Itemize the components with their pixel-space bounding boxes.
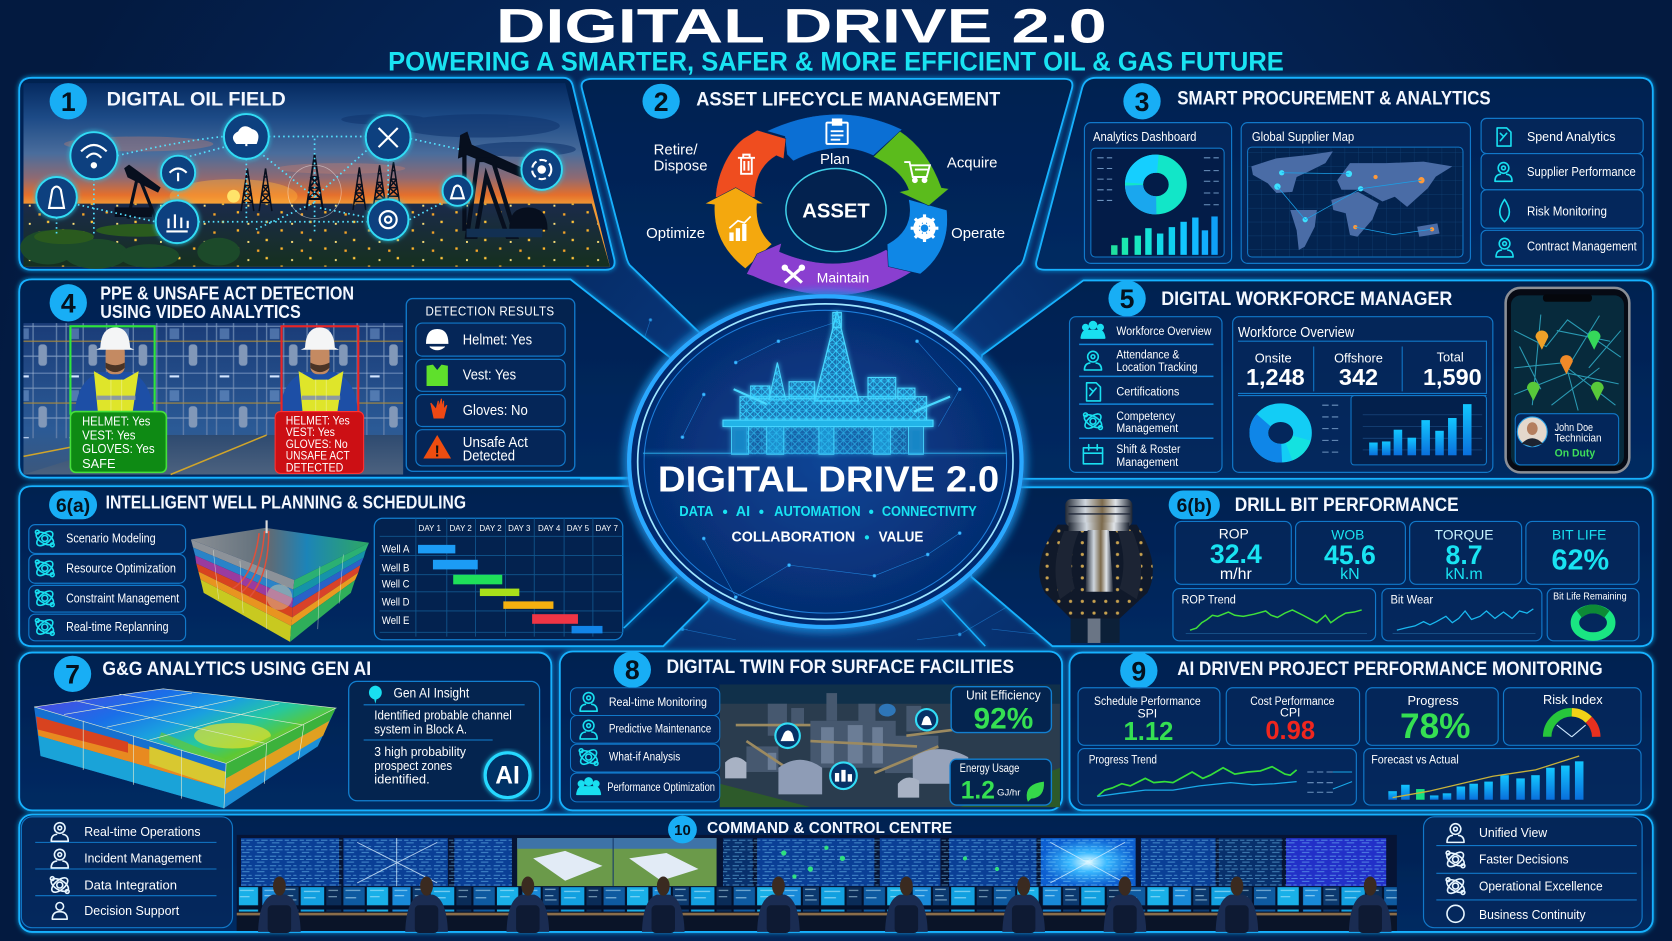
hub keywords: VALUE <box>879 530 924 546</box>
badge 5 <box>1108 280 1146 317</box>
workforce list: Workforce Overview <box>1116 324 1211 338</box>
planning list: Resource Optimization <box>66 561 176 576</box>
lifecycle ring <box>705 114 949 295</box>
3D reservoir block <box>191 520 369 642</box>
workforce overview card: Offshore <box>1334 351 1383 366</box>
facility node glyphs <box>781 716 932 782</box>
left capability list: Data Integration <box>84 877 177 892</box>
twin list: Predictive Maintenance <box>609 723 711 736</box>
workforce overview card: 342 <box>1339 364 1378 390</box>
panel 4: PPE and unsafe act detection <box>19 279 693 478</box>
heading: ASSET LIFECYCLE MANAGEMENT <box>696 90 1000 111</box>
panel 3: smart procurement and analytics <box>1036 78 1653 270</box>
hub keywords: CONNECTIVITY <box>882 504 977 520</box>
workforce list: Management <box>1116 455 1179 469</box>
Gen AI insight card: system in Block A. <box>374 722 467 737</box>
metric cards: 8.7 <box>1446 540 1483 570</box>
safe label: HELMET: Yes <box>82 413 150 428</box>
procurement list: Risk Monitoring <box>1527 203 1607 218</box>
network background pattern <box>574 318 1068 640</box>
metric cards: m/hr <box>1220 566 1253 583</box>
unit efficiency card <box>951 687 1051 735</box>
badge 6a: 6(a) <box>56 496 90 517</box>
KPI: progress: 78% <box>1400 707 1470 746</box>
video wall <box>237 835 1397 933</box>
KPI: risk index gauge: Risk Index <box>1543 692 1603 707</box>
metric cards: 62% <box>1551 544 1609 576</box>
panel 8: digital twin for surface facilities <box>560 652 1062 810</box>
unsafe label: UNSAFE ACT <box>286 450 350 463</box>
Gen AI insight card: Identified probable channel <box>374 708 512 723</box>
workforce overview card: Total <box>1437 349 1464 364</box>
workforce overview card <box>1233 317 1493 472</box>
worker unsafe <box>279 326 358 415</box>
unsafe label: HELMET: Yes <box>286 414 350 427</box>
lifecycle labels: Optimize <box>646 225 705 242</box>
bit wear chart <box>1382 589 1542 641</box>
icon: vest <box>427 365 448 386</box>
workforce list: Shift & Roster <box>1116 442 1180 456</box>
badge 9: 9 <box>1131 656 1146 686</box>
AI badge: AI <box>495 763 520 790</box>
energy usage card: GJ/hr <box>997 787 1021 798</box>
metric cards: WOB <box>1331 527 1364 543</box>
panel 7: G&G analytics using gen AI <box>19 653 551 810</box>
phone mockup <box>1506 288 1629 472</box>
workforce list: Attendance & <box>1116 347 1179 361</box>
gantt chart: DAY 3 <box>508 524 531 533</box>
gantt chart: DAY 2 <box>449 524 472 533</box>
KPI: cost performance: 0.98 <box>1265 717 1315 745</box>
KPI: schedule performance: SPI <box>1137 707 1157 721</box>
planning list <box>29 525 186 641</box>
KPI: progress <box>1366 688 1498 746</box>
forecast vs actual chart: Forecast vs Actual <box>1371 752 1459 766</box>
KPI: progress: Progress <box>1408 693 1459 708</box>
KPI: risk index gauge <box>1503 688 1641 745</box>
gantt chart: DAY 7 <box>596 524 618 533</box>
gantt chart: Well B <box>382 563 409 575</box>
icon: cart <box>904 162 930 182</box>
icon nodes <box>36 114 562 243</box>
badge 8 <box>614 652 651 688</box>
badge 3: 3 <box>1135 87 1149 117</box>
gantt chart: DAY 4 <box>538 524 561 533</box>
pump jack small <box>115 165 160 219</box>
KPI: cost performance: CPI <box>1280 706 1300 720</box>
facility nodes <box>775 709 937 789</box>
twin list <box>570 688 720 802</box>
metric cards: ROP <box>1219 525 1249 541</box>
workforce overview card: Onsite <box>1255 351 1292 366</box>
detection results card <box>406 299 575 471</box>
hub keywords <box>679 504 977 546</box>
right benefits list <box>1424 817 1642 928</box>
KPI: schedule performance: Schedule Performance <box>1094 694 1201 708</box>
energy usage card: Energy Usage <box>960 761 1020 775</box>
node icon glyphs <box>49 127 551 231</box>
asset hub <box>786 168 886 252</box>
analytics dashboard card <box>1084 123 1232 263</box>
asset hub: ASSET <box>802 201 870 223</box>
oil field photo <box>20 83 610 269</box>
gantt chart: Well E <box>382 615 409 627</box>
metric cards: kN.m <box>1445 566 1483 583</box>
operators <box>258 876 1392 933</box>
Gen AI insight card: 3 high probability <box>374 744 466 759</box>
right benefits list: Operational Excellence <box>1479 878 1603 893</box>
hub node network <box>681 320 961 599</box>
heading: PPE & UNSAFE ACT DETECTION <box>100 284 354 304</box>
gantt chart: Well A <box>382 543 410 555</box>
forecast vs actual chart <box>1364 749 1641 805</box>
safe label: VEST: Yes <box>82 427 135 442</box>
panel 6a: intelligent well planning and scheduling <box>19 486 709 646</box>
badge 2 <box>642 84 680 119</box>
gantt chart: Well C <box>382 579 409 591</box>
donut chart <box>1134 164 1178 205</box>
metric cards <box>1175 521 1639 584</box>
drill bit illustration <box>1039 499 1153 643</box>
workforce list: Management <box>1116 421 1179 435</box>
detection results card: DETECTION RESULTS <box>425 304 554 319</box>
left capability list: Decision Support <box>84 903 179 918</box>
KPI: schedule performance: 1.12 <box>1124 718 1173 746</box>
detection results card: Gloves: No <box>463 403 528 419</box>
left capability list <box>21 817 232 928</box>
right benefits list: Unified View <box>1479 825 1548 840</box>
metric cards: 32.4 <box>1210 539 1262 569</box>
workforce overview card: 1,248 <box>1246 364 1305 390</box>
Gen AI insight card <box>349 681 540 801</box>
hub keywords: AI <box>736 504 750 520</box>
badge 6a <box>49 490 97 519</box>
unsafe label <box>275 412 364 474</box>
gantt chart: Well D <box>382 597 409 609</box>
unit efficiency card: Unit Efficiency <box>966 687 1041 702</box>
heading: AI DRIVEN PROJECT PERFORMANCE MONITORING <box>1177 659 1603 680</box>
phone mockup: John Doe <box>1555 422 1593 434</box>
safe label: SAFE <box>82 456 116 471</box>
badge 1: 1 <box>61 87 76 117</box>
progress trend chart: Progress Trend <box>1089 752 1157 766</box>
badge 6b <box>1169 490 1220 519</box>
hub keywords: DATA <box>679 504 713 520</box>
unsafe label: GLOVES: No <box>286 438 348 451</box>
icon: gear <box>911 214 938 242</box>
icon: wrench <box>782 264 805 283</box>
lifecycle labels: Operate <box>951 225 1005 242</box>
lifecycle labels: Maintain <box>817 270 869 286</box>
planning list: Constraint Management <box>66 590 180 605</box>
facility photo <box>720 685 1060 807</box>
heading: DRILL BIT PERFORMANCE <box>1235 495 1459 516</box>
bar chart <box>1111 216 1218 255</box>
metric cards: BIT LIFE <box>1552 527 1606 543</box>
Gen AI insight card: Gen AI Insight <box>393 684 469 700</box>
workforce overview card: 1,590 <box>1423 364 1482 390</box>
twin list: What-if Analysis <box>609 750 680 763</box>
Gen AI insight card: identified. <box>374 772 430 787</box>
heading: SMART PROCUREMENT & ANALYTICS <box>1177 88 1491 109</box>
global supplier map card <box>1241 123 1470 263</box>
offshore platform <box>643 311 1007 454</box>
badge 5: 5 <box>1120 284 1135 314</box>
phone mockup: On Duty <box>1555 447 1596 459</box>
detection results card: Unsafe Act <box>463 435 528 451</box>
pump jack large <box>459 132 547 237</box>
twin list: Real-time Monitoring <box>609 696 707 709</box>
heading: USING VIDEO ANALYTICS <box>100 302 301 322</box>
badge 6b: 6(b) <box>1177 496 1212 517</box>
planning list: Scenario Modeling <box>66 531 156 546</box>
badge 10: 10 <box>674 822 691 839</box>
icon: clipboard <box>826 119 848 144</box>
badge 9 <box>1120 653 1157 689</box>
icon: helmet <box>427 329 448 350</box>
badge 1 <box>50 83 87 119</box>
hub title: DIGITAL DRIVE 2.0 <box>658 459 999 500</box>
heading: DIGITAL TWIN FOR SURFACE FACILITIES <box>666 657 1014 678</box>
AI badge <box>485 753 530 798</box>
procurement list: Supplier Performance <box>1527 164 1636 179</box>
planning list: Real-time Replanning <box>66 619 169 634</box>
badge 4 <box>50 284 87 321</box>
heading: INTELLIGENT WELL PLANNING & SCHEDULING <box>106 493 466 513</box>
energy usage card <box>950 759 1051 805</box>
lifecycle labels: Retire/ <box>654 142 698 159</box>
icon: bulb <box>369 686 382 704</box>
workforce overview card: Workforce Overview <box>1238 325 1355 341</box>
badge 2: 2 <box>654 87 669 117</box>
gantt chart <box>374 518 623 640</box>
safe label: GLOVES: Yes <box>82 441 155 456</box>
procurement list: Contract Management <box>1527 239 1637 254</box>
unit efficiency card: 92% <box>974 702 1033 735</box>
badge 10 <box>668 816 697 843</box>
detection results card: Vest: Yes <box>463 368 516 384</box>
procurement list <box>1481 118 1643 266</box>
panel 5: digital workforce manager <box>960 280 1653 479</box>
title: DIGITAL DRIVE 2.0 <box>496 1 1107 54</box>
lifecycle labels <box>646 142 1005 286</box>
worker safe <box>70 326 155 415</box>
metric cards: TORQUE <box>1435 527 1494 543</box>
panel 1: digital oil field <box>19 78 615 270</box>
badge 4: 4 <box>61 288 76 318</box>
KPI: schedule performance <box>1078 688 1220 746</box>
heading: DIGITAL OIL FIELD <box>107 90 286 111</box>
KPI: cost performance: Cost Performance <box>1250 694 1335 708</box>
icon: trash <box>738 155 755 174</box>
phone mockup: Technician <box>1555 432 1602 444</box>
safe label <box>70 412 166 472</box>
metric cards: kN <box>1340 566 1360 583</box>
workforce list: Competency <box>1116 409 1176 423</box>
panel 2: asset lifecycle management <box>582 79 1072 333</box>
analytics dashboard card: Analytics Dashboard <box>1093 129 1196 144</box>
badge 3 <box>1123 83 1161 119</box>
lifecycle labels: Dispose <box>654 158 708 175</box>
panel 9: AI driven project performance monitoring <box>1070 653 1653 810</box>
global supplier map card: Global Supplier Map <box>1252 129 1354 144</box>
workforce list: Certifications <box>1116 385 1179 399</box>
twin list: Performance Optimization <box>607 781 715 794</box>
3D seismic block <box>34 689 336 808</box>
bit wear chart: Bit Wear <box>1390 593 1433 607</box>
badge 8: 8 <box>625 655 640 685</box>
workforce list <box>1070 317 1222 472</box>
left capability list: Real-time Operations <box>84 824 201 839</box>
ROP trend chart <box>1173 589 1376 641</box>
procurement list: Spend Analytics <box>1527 129 1615 144</box>
world map <box>1251 151 1452 250</box>
bit life gauge <box>1547 589 1639 641</box>
detection results card: Helmet: Yes <box>463 332 532 348</box>
progress trend chart <box>1078 749 1356 805</box>
right benefits list: Faster Decisions <box>1479 852 1569 867</box>
detection results card: Detected <box>463 449 515 465</box>
right benefits list: Business Continuity <box>1479 907 1586 922</box>
bit life gauge: Bit Life Remaining <box>1553 591 1627 602</box>
metric cards: 45.6 <box>1324 540 1376 570</box>
operator desk monitors <box>239 887 1397 912</box>
gantt chart: DAY 5 <box>567 524 590 533</box>
badge 7: 7 <box>65 659 80 689</box>
central hub: digital drive 2.0 <box>580 296 1080 627</box>
heading: G&G ANALYTICS USING GEN AI <box>102 659 371 680</box>
unsafe label: VEST: Yes <box>286 426 335 439</box>
subtitle: POWERING A SMARTER, SAFER & MORE EFFICIENT OIL & GAS FUTURE <box>388 46 1284 76</box>
icon: glove <box>431 399 447 418</box>
lifecycle labels: Acquire <box>947 154 997 171</box>
ROP trend chart: ROP Trend <box>1181 593 1236 607</box>
hub keywords: COLLABORATION <box>732 530 855 546</box>
badge 7 <box>54 656 91 692</box>
left capability list: Incident Management <box>84 851 202 866</box>
plant floor photo <box>23 323 403 474</box>
icon: growth chart <box>729 216 751 241</box>
icon: warning: ! <box>435 443 440 460</box>
donut chart <box>1259 413 1303 453</box>
heading <box>100 284 354 322</box>
satellite view screens <box>517 838 717 886</box>
gantt chart: DAY 1 <box>419 524 441 533</box>
energy usage card: 1.2 <box>961 778 995 805</box>
gantt chart: DAY 2 <box>479 524 502 533</box>
panel 10: command and control centre <box>19 815 1653 933</box>
hub keywords: AUTOMATION <box>774 504 861 520</box>
bar chart <box>1351 396 1486 465</box>
heading: DIGITAL WORKFORCE MANAGER <box>1161 289 1452 310</box>
heading: COMMAND & CONTROL CENTRE <box>707 820 953 837</box>
KPI: cost performance <box>1226 688 1360 745</box>
panel 6b: drill bit performance <box>942 487 1653 646</box>
workforce list: Location Tracking <box>1116 360 1198 374</box>
unsafe label: DETECTED <box>286 461 343 474</box>
Gen AI insight card: prospect zones <box>374 758 452 773</box>
sensor network lines <box>57 136 460 237</box>
lifecycle labels: Plan <box>820 151 850 168</box>
icon: warning <box>423 435 451 460</box>
